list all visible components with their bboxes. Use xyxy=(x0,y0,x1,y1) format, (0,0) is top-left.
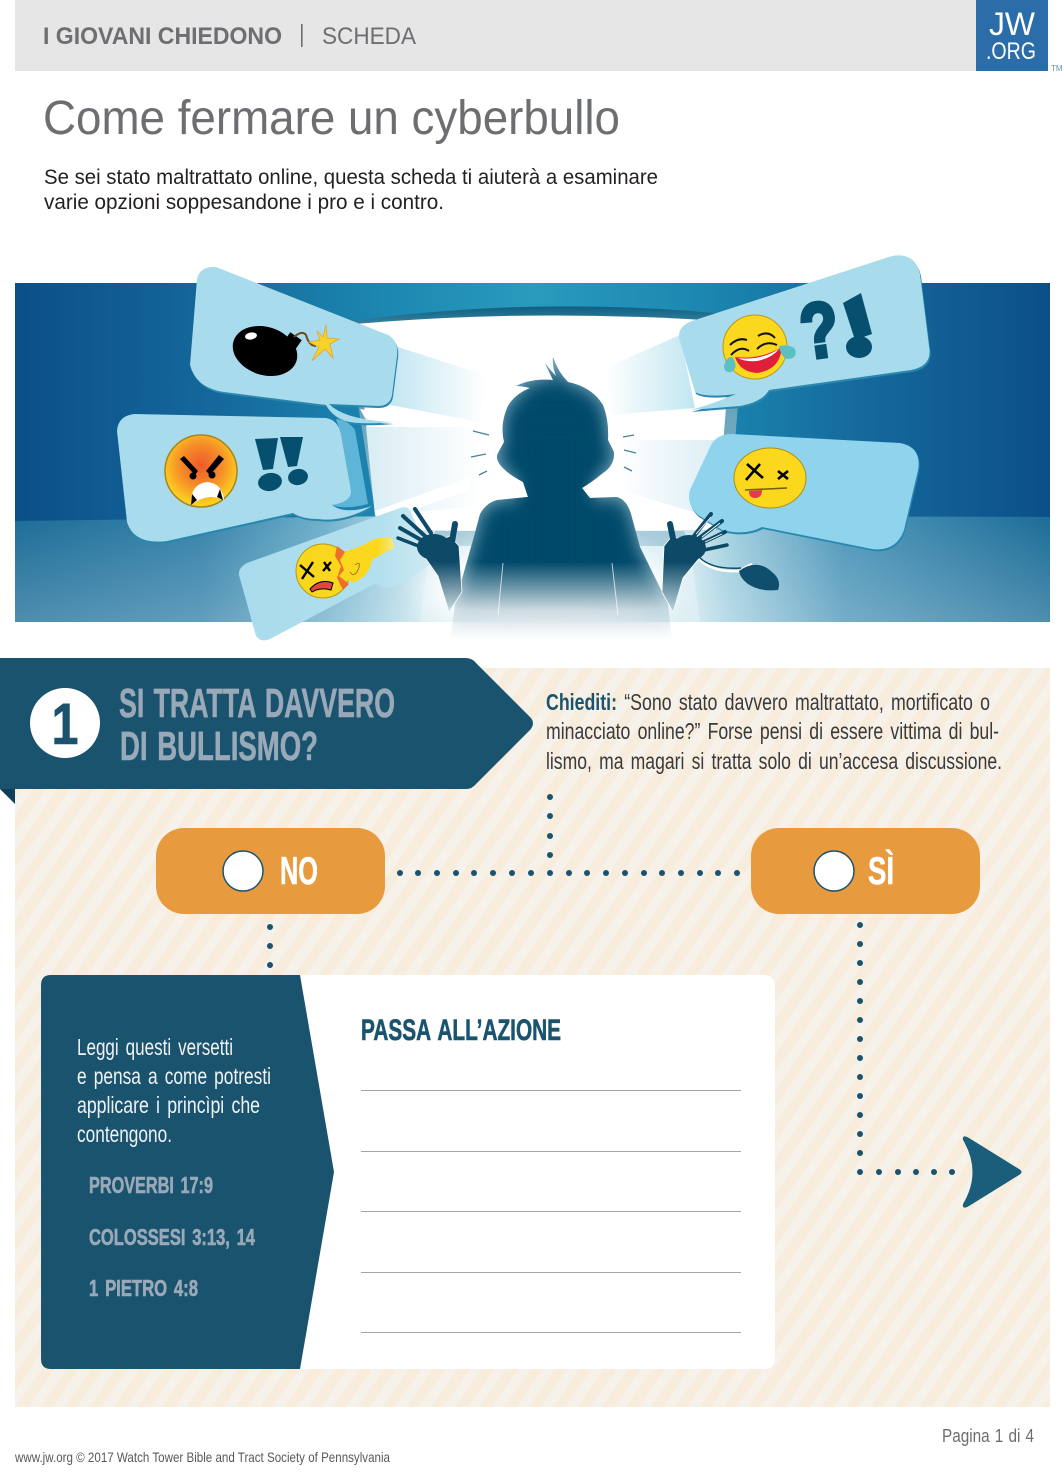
light rays from bubbles xyxy=(360,335,695,424)
illustration background xyxy=(15,283,1050,640)
prompt text: contengono. xyxy=(77,1121,172,1147)
copyright: www.jw.org © 2017 Watch Tower Bible and Tract Society of Pennsylvania xyxy=(14,1449,390,1465)
intro text: varie opzioni soppesandone i pro e i contro. xyxy=(44,191,444,214)
intro text xyxy=(44,166,658,214)
icon: angry face xyxy=(165,435,237,507)
scripture references: 1 PIETRO 4:8 xyxy=(89,1275,198,1301)
right arm and hand xyxy=(662,514,727,612)
mouse with cable xyxy=(698,557,779,590)
JW.ORG logo: .ORG xyxy=(986,38,1036,65)
speech bubble: bomb xyxy=(190,267,398,425)
prompt text: Leggi questi versetti xyxy=(77,1034,233,1060)
banner heading: DI BULLISMO? xyxy=(120,723,318,769)
panel: scripture prompt xyxy=(41,975,334,1369)
prompt text: e pensa a come potresti xyxy=(77,1063,271,1089)
button: yes: SÌ xyxy=(868,849,894,893)
speech bubble: punch xyxy=(239,507,430,640)
intro text: Se sei stato maltrattato online, questa scheda ti aiuterà a esaminare xyxy=(44,166,658,189)
banner fold xyxy=(0,789,15,804)
button: yes xyxy=(751,828,980,914)
number badge xyxy=(30,688,100,758)
writing lines xyxy=(361,1090,741,1333)
title: Come fermare un cyberbullo xyxy=(43,92,620,145)
icon: bomb xyxy=(226,318,339,384)
boy silhouette xyxy=(398,350,727,640)
prompt text xyxy=(77,1034,271,1147)
panel: action xyxy=(41,975,775,1369)
scripture references: COLOSSESI 3:13, 14 xyxy=(89,1224,255,1250)
left arm and hand xyxy=(398,509,462,612)
icon: laughing face xyxy=(723,315,796,379)
boy body xyxy=(452,357,671,634)
scripture references xyxy=(89,1172,255,1301)
button: no: NO xyxy=(280,850,318,893)
JW.ORG logo: TM xyxy=(1051,64,1063,73)
section 1 banner xyxy=(0,658,533,804)
arrow xyxy=(963,1136,1022,1208)
icon: punched face xyxy=(296,537,395,598)
speech bubble: dizzy xyxy=(689,434,920,551)
body rim lines xyxy=(498,563,618,615)
header bar: SCHEDA xyxy=(322,23,416,50)
stripe panel xyxy=(15,668,1050,1407)
scripture references: PROVERBI 17:9 xyxy=(89,1172,213,1198)
dotted connectors xyxy=(267,794,955,1175)
page number: Pagina 1 di 4 xyxy=(942,1426,1034,1446)
speech bubble: angry xyxy=(117,414,373,544)
JW.ORG logo xyxy=(976,0,1063,73)
number badge: 1 xyxy=(52,692,78,757)
prompt text: applicare i princìpi che xyxy=(77,1092,260,1118)
header bar xyxy=(15,0,976,71)
illustration: boy in front of screen with hostile speech bubbles xyxy=(15,255,1050,640)
header bar: I GIOVANI CHIEDONO xyxy=(43,23,282,50)
action heading: PASSA ALL’AZIONE xyxy=(361,1014,561,1047)
icon: dizzy face xyxy=(734,448,806,508)
banner heading xyxy=(119,680,395,769)
motion marks xyxy=(471,431,636,475)
speech bubble: laughing xyxy=(679,255,931,412)
JW.ORG logo: JW xyxy=(989,6,1036,42)
question text xyxy=(546,689,1002,774)
icon: question and exclamation marks: ? xyxy=(795,284,845,376)
icon: double exclamation marks xyxy=(255,437,309,493)
button: no xyxy=(156,828,385,914)
banner heading: SI TRATTA DAVVERO xyxy=(119,680,395,726)
